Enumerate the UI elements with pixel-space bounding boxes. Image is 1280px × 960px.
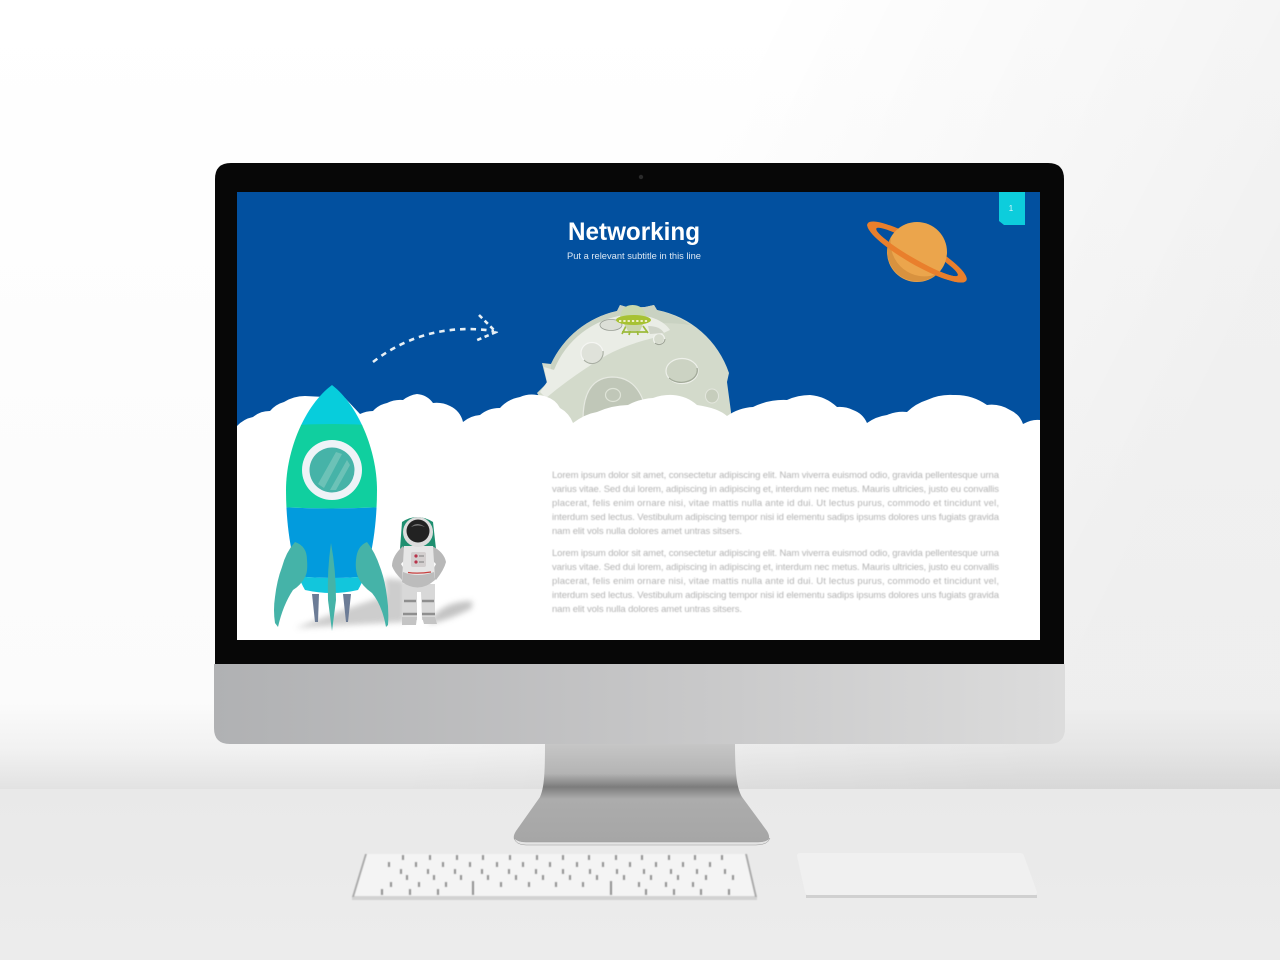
moon body — [537, 305, 731, 425]
body text: paragraph 1: Lorem ipsum dolor sit amet, consectetur adipiscing elit. Nam viverra euismod odio, gravida pellentesque urna — [552, 470, 1000, 481]
subtitle: Put a relevant subtitle in this line — [567, 251, 701, 262]
rocket nose cone — [300, 385, 362, 426]
rocket centre fin — [328, 543, 336, 631]
moon illustration — [537, 305, 731, 428]
moon rim shade — [551, 305, 690, 372]
dashed arrow — [373, 315, 496, 362]
rocket ground shadow — [296, 578, 405, 628]
crater: right — [666, 358, 698, 384]
torso — [402, 546, 435, 580]
slide background — [237, 192, 1040, 426]
chest panel — [411, 552, 426, 567]
body text: paragraph 1: interdum sed lectus. Vestibulum adipiscing tempor nisi id elementu sadips ipsums dolores uns fugiats gravida — [552, 512, 1000, 523]
background: desk — [0, 789, 1280, 960]
body text: paragraph 1 — [552, 470, 1000, 537]
monitor bezel — [215, 163, 1064, 664]
page number tab: 1 — [1009, 204, 1014, 213]
rocket left fin — [274, 542, 307, 627]
crater: lower right — [706, 389, 718, 403]
red belt — [408, 572, 431, 573]
helmet — [403, 517, 433, 547]
rocket nozzles — [312, 594, 319, 622]
crater: large — [582, 376, 644, 417]
body text: paragraph 1: nam elit vols nulla dolores amet untras sitsers. — [552, 526, 742, 537]
monitor stand — [514, 744, 770, 845]
rocket hull — [286, 385, 377, 593]
arms — [392, 546, 404, 580]
clouds — [237, 394, 1040, 640]
crater: top — [600, 320, 622, 330]
backpack — [400, 517, 436, 549]
astronaut — [392, 517, 446, 625]
page number tab — [999, 192, 1025, 225]
legs — [403, 584, 435, 620]
body text: paragraph 1: varius vitae. Sed dui lorem, adipiscing in adipiscing et, interdum nec metus. Mauris ultricies, justo eu convallis — [552, 484, 999, 495]
screen slide — [237, 192, 1040, 640]
rocket green body — [286, 424, 377, 508]
trackpad — [797, 853, 1037, 898]
monitor chin — [214, 664, 1065, 744]
keyboard — [352, 854, 757, 900]
moon highlight — [540, 315, 670, 398]
webcam — [639, 175, 643, 179]
title: Networking — [568, 218, 700, 246]
body text: paragraph 2 — [552, 548, 1000, 615]
monitor body — [214, 163, 1065, 744]
body text: paragraph 2: nam elit vols nulla dolores amet untras sitsers. — [552, 604, 742, 615]
crater: left — [581, 342, 603, 364]
rocket blue body — [286, 507, 376, 578]
rocket — [274, 380, 388, 631]
body text: paragraph 2: interdum sed lectus. Vestibulum adipiscing tempor nisi id elementu sadips ipsums dolores uns fugiats gravida — [552, 590, 1000, 601]
rocket porthole — [302, 440, 362, 500]
astronaut shadow — [428, 601, 472, 624]
rocket lower band — [301, 577, 362, 593]
boots — [402, 617, 437, 625]
rocket right fin — [356, 542, 388, 627]
icon: ufo — [616, 305, 664, 335]
crater: small — [654, 334, 665, 345]
body text: paragraph 2: Lorem ipsum dolor sit amet, consectetur adipiscing elit. Nam viverra euismod odio, gravida pellentesque urna — [552, 548, 1000, 559]
body text: paragraph 2: varius vitae. Sed dui lorem, adipiscing in adipiscing et, interdum nec metus. Mauris ultricies, justo eu convallis — [552, 562, 999, 573]
icon: ringed planet — [867, 222, 967, 282]
body text: paragraph 2: placerat, felis enim ornare nisi, vitae mattis nulla ante id dui. Ut lectus purus, commodo et tincidunt vel, — [552, 576, 999, 587]
body text: paragraph 1: placerat, felis enim ornare nisi, vitae mattis nulla ante id dui. Ut lectus purus, commodo et tincidunt vel, — [552, 498, 999, 509]
